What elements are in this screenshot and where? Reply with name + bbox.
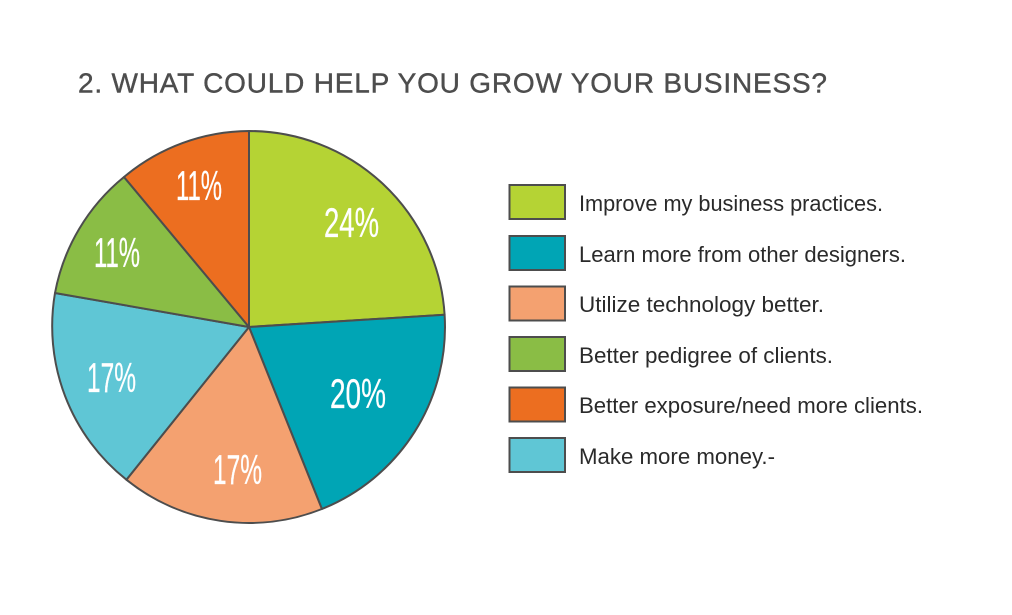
label 17% bottom: 17% — [213, 446, 262, 493]
pie chart — [52, 131, 445, 523]
legend item: pedigree — [510, 337, 833, 371]
legend item: learn: Learn more from other designers. — [579, 242, 906, 267]
title: 2. WHAT COULD HELP YOU GROW YOUR BUSINESS? — [78, 68, 827, 98]
legend item: improve: Improve my business practices. — [579, 191, 883, 216]
legend item: technology: Utilize technology better. — [579, 292, 824, 317]
percentage labels — [87, 162, 386, 493]
legend — [510, 185, 923, 472]
label 24%: 24% — [324, 199, 379, 246]
label 20%: 20% — [330, 370, 386, 417]
slice: improve business practices 24% — [249, 131, 445, 327]
slice: better exposure 11% — [124, 131, 249, 327]
legend item: pedigree: Better pedigree of clients. — [579, 343, 833, 368]
slice: make more money 17% — [52, 293, 249, 480]
label 17% left: 17% — [87, 354, 136, 401]
label 11% left: 11% — [94, 229, 140, 276]
legend item: money: Make more money.- — [579, 444, 775, 469]
legend item: learn — [510, 236, 906, 270]
slice: utilize technology 17% — [126, 327, 322, 523]
label 11% top: 11% — [176, 162, 222, 209]
slice: pedigree of clients 11% — [55, 177, 249, 327]
legend item: exposure: Better exposure/need more clients. — [579, 393, 923, 418]
legend item: money — [510, 438, 775, 472]
legend item: technology — [510, 286, 824, 320]
slice: learn from designers 20% — [249, 315, 445, 509]
legend item: exposure — [510, 388, 923, 422]
legend item: improve — [510, 185, 883, 219]
